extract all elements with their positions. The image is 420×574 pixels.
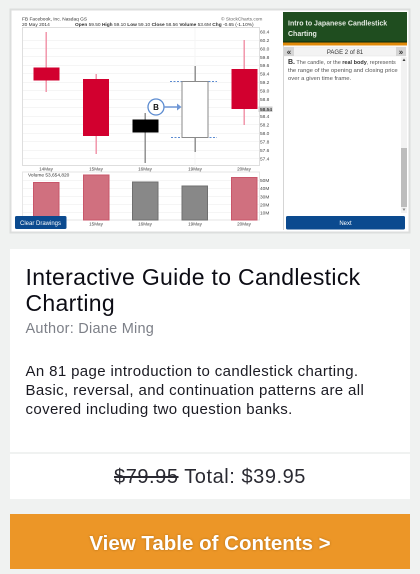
panel: lesson sidebar: [283, 12, 407, 230]
volume chart: Volume 53,654,820: [28, 172, 70, 178]
pager: «: [287, 48, 292, 56]
panel: chart screenshot: [10, 8, 410, 234]
date labels: 20May: [237, 166, 252, 172]
description: covered including two question banks.: [26, 401, 293, 418]
date labels: 19May: [188, 166, 203, 172]
sidebar header: [283, 12, 407, 46]
button: Clear Drawings: [15, 216, 66, 229]
button: Next: Next: [339, 221, 352, 227]
candle 14May: [34, 32, 60, 92]
date labels: 15May: [89, 166, 104, 172]
title: Charting: [26, 290, 115, 316]
chart header text: [22, 16, 262, 34]
price axis: 59.6: [260, 63, 270, 69]
divider: [10, 452, 410, 454]
scrollbar: [401, 57, 407, 213]
price axis: 60.2: [260, 38, 270, 44]
date labels: 16May: [138, 222, 153, 226]
volume axis: [260, 178, 269, 216]
price axis: 60.4: [260, 30, 270, 36]
sidebar header: Intro to Japanese Candlestick: [288, 20, 387, 28]
volume axis: 50M: [260, 178, 269, 184]
button: View Table of Contents: [10, 514, 410, 569]
lesson text: B. The candle, or the real body, represents: [288, 59, 396, 66]
button: Clear Drawings: Clear Drawings: [20, 221, 61, 227]
author: Author: Diane Ming: [26, 321, 154, 337]
button: Next: [286, 216, 405, 230]
price axis: 58.4: [260, 114, 270, 120]
sidebar header: Charting: [288, 31, 317, 38]
volume axis: 30M: [260, 194, 269, 200]
description: An 81 page introduction to candlestick charting.: [26, 362, 358, 380]
chart header text: © StockCharts.com: [221, 16, 262, 22]
title: Interactive Guide to Candlestick: [26, 264, 360, 290]
price axis: 59.8: [260, 55, 270, 61]
title: [26, 264, 360, 316]
price axis: 58.0: [260, 131, 270, 137]
volume axis: 10M: [260, 210, 269, 216]
price axis: 57.8: [260, 140, 270, 146]
pager: [284, 47, 406, 56]
price: $79.95 Total: $39.95: [114, 466, 306, 488]
callout B with arrow: B: [153, 103, 159, 112]
callout B with arrow: [148, 99, 182, 115]
chart header text: FB (Daily) 58.54 (20 May): [28, 28, 83, 34]
lesson text: the range of the opening and closing price: [288, 68, 398, 74]
price axis: 59.0: [260, 88, 270, 94]
candle 16May: [132, 113, 158, 163]
lesson text: [288, 59, 398, 82]
date labels: 14May: [39, 166, 54, 172]
date labels: 15May: [89, 222, 104, 226]
candle 20May: [232, 40, 258, 125]
price axis: 57.4: [260, 156, 270, 162]
panel: product card: [10, 249, 410, 499]
price axis: [258, 30, 272, 162]
chart header text: 20 May 2014: [22, 22, 50, 28]
pager: »: [399, 48, 404, 56]
button: View Table of Contents: View Table of Contents >: [89, 532, 331, 555]
volume chart: [22, 172, 260, 220]
price axis: 59.4: [260, 72, 270, 78]
description: Basic, reversal, and continuation patterns are all: [26, 382, 364, 399]
volume axis: 20M: [260, 202, 269, 208]
candlestick chart: [22, 28, 260, 220]
lesson text: over a given time frame.: [288, 76, 352, 82]
price axis: 60.0: [260, 46, 270, 52]
date labels: [39, 166, 252, 226]
date labels: 20May: [237, 222, 252, 226]
price axis: 57.6: [260, 148, 270, 154]
date labels: 16May: [138, 166, 153, 172]
candle 19May: [170, 66, 217, 152]
price axis: 59.2: [260, 80, 270, 86]
price axis: 58.2: [260, 122, 270, 128]
chart header text: FB Facebook, Inc. Nasdaq GS: [22, 16, 87, 22]
date labels: 19May: [188, 222, 203, 226]
price axis: 58.54: [260, 107, 272, 113]
chart header text: Open 59.50 High 59.10 Low 59.10 Close 58.56 Volume 53.6M Chg -0.65 (-1.10%): [75, 22, 254, 28]
description: [26, 362, 364, 418]
volume axis: 40M: [260, 186, 269, 192]
candle 15May: [83, 74, 109, 154]
price axis: 58.8: [260, 97, 270, 103]
pager: PAGE 2 of 81: [327, 50, 364, 56]
